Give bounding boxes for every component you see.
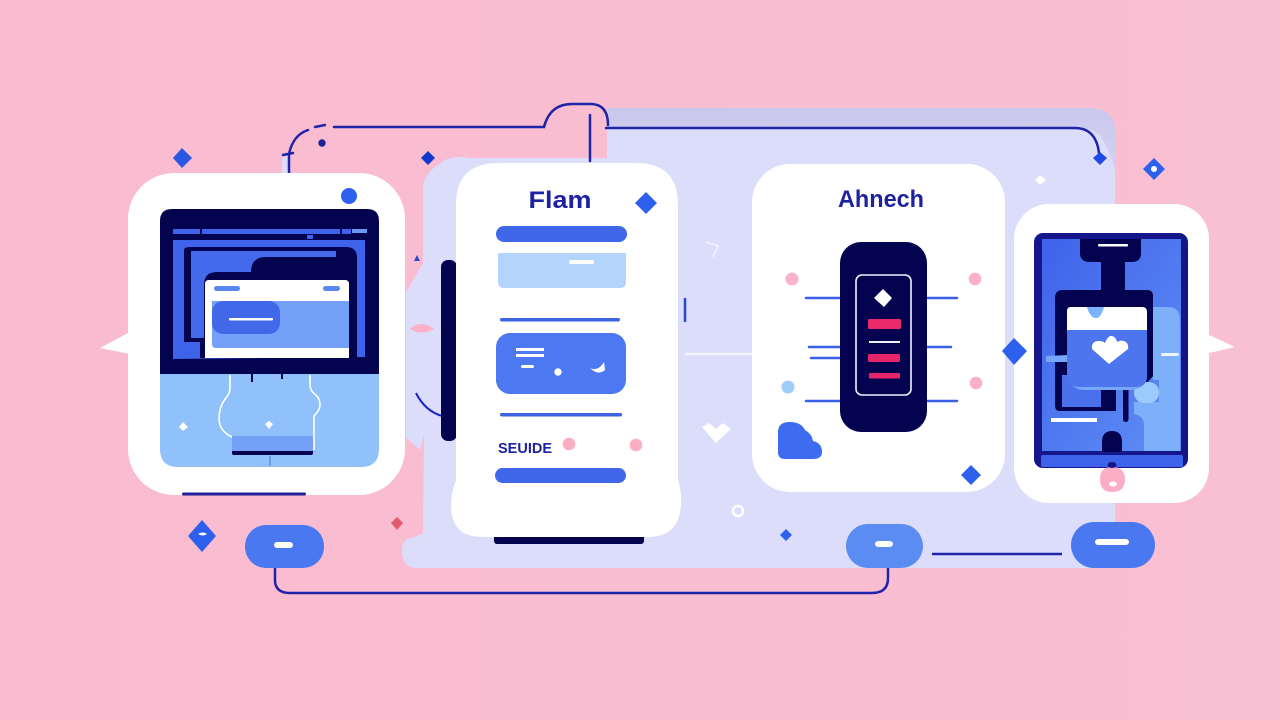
icon: red diamond	[391, 517, 403, 530]
card 4 dialog body	[1067, 330, 1147, 387]
card 3 device diamond	[874, 289, 892, 307]
card 4 dark holder	[1055, 290, 1153, 411]
card 4 holder inner	[1062, 375, 1101, 407]
icon: tiny mark	[414, 255, 420, 261]
card 3 dots	[786, 272, 798, 286]
icon: card 3 diamond	[961, 465, 981, 485]
card 1 stem	[219, 374, 320, 466]
icon: pink mark	[410, 324, 434, 332]
card 2 divider two	[500, 413, 622, 416]
card 4 top notch	[1080, 239, 1141, 290]
card 3 device screen	[856, 275, 911, 395]
heading: Flam: Flam	[528, 187, 592, 214]
card 4 right light area	[1134, 307, 1180, 451]
card 1: browser	[100, 173, 405, 496]
card 1 dark window	[184, 247, 357, 358]
connector: bottom line	[275, 566, 888, 593]
card 2 divider one	[500, 318, 620, 322]
icon: cloud	[778, 422, 822, 459]
divider tab under card two	[494, 530, 644, 544]
connector: button link	[932, 553, 1062, 555]
icon: white heart	[702, 423, 731, 443]
card 4 stem	[1123, 388, 1128, 422]
icon: mid diamond	[1002, 338, 1027, 365]
card 4 white label	[1051, 418, 1097, 422]
card 1 blue window	[173, 240, 365, 359]
card 2 bottom bar	[495, 468, 626, 483]
decorative chevron	[706, 242, 718, 257]
card 4 foot bar	[1041, 455, 1183, 467]
card 2: form	[451, 163, 681, 537]
heading: Ahnech: Ahnech	[838, 186, 924, 213]
icon: left top diamond	[173, 148, 192, 168]
card 4 tail	[1205, 333, 1235, 354]
card 1 top bars	[173, 229, 367, 239]
card 4 body	[1014, 204, 1209, 503]
card 4 soft glow	[1134, 382, 1159, 403]
card 1 blue tab outline	[191, 251, 336, 338]
card 1 base	[232, 436, 313, 451]
card 1 dark screen	[160, 209, 379, 374]
card 1 underline	[182, 492, 306, 496]
card 4: phone	[1014, 204, 1235, 503]
button two	[846, 524, 923, 568]
card 1 dialog content	[212, 301, 349, 348]
connector: tick	[684, 298, 686, 322]
card 4 pink tag	[1100, 467, 1125, 492]
icon: left bottom diamond	[188, 520, 216, 552]
card 1 sparks	[179, 421, 273, 431]
card 3 body	[752, 164, 1005, 492]
icon: small diamond	[421, 151, 435, 165]
card 4 phone frame	[1034, 233, 1188, 468]
card 2 pink dots	[563, 438, 575, 450]
icon: small ring	[733, 506, 743, 516]
icon: right top diamond	[1143, 158, 1165, 180]
card 2 blue panel	[496, 333, 626, 394]
card 3 side lines	[806, 298, 957, 401]
panel: lavender backdrop	[282, 108, 1118, 568]
button three	[1071, 522, 1155, 568]
card 4 screen	[1042, 239, 1181, 451]
card 4 dialog drop	[1087, 307, 1104, 318]
card 1 lower pane	[160, 370, 379, 467]
handle bar beside card two	[441, 260, 457, 441]
icon: connector dot	[318, 139, 326, 147]
connector: middle line	[685, 353, 752, 355]
button one	[245, 525, 324, 568]
card 1 dot	[341, 188, 357, 204]
icon: white spark	[1035, 175, 1046, 185]
connector: top line	[283, 104, 1099, 173]
card 4 light tab	[1046, 355, 1068, 362]
icon: diamond	[635, 192, 657, 214]
card 3 device body	[840, 242, 927, 432]
icon: connector arrow tip	[1093, 152, 1107, 165]
icon: white heart	[1092, 336, 1128, 364]
card 1 dialog button	[212, 301, 280, 334]
label: Seuide: SEUIDE	[498, 440, 552, 457]
card 2 top bar	[496, 226, 627, 242]
card 1 tail	[100, 332, 130, 354]
card 1 dialog bars	[214, 286, 240, 291]
card 2 body	[451, 163, 681, 537]
card 2 light panel	[498, 253, 626, 288]
card 1 body	[128, 173, 405, 495]
icon: bottom small diamond	[780, 529, 792, 541]
card 3 red bars	[868, 319, 901, 329]
card 3: device	[752, 164, 1005, 492]
connector: card one curve	[416, 393, 442, 416]
card 4 dark port	[1102, 431, 1122, 452]
card 4 white dialog	[1067, 307, 1147, 330]
card 1 white dialog	[205, 280, 349, 358]
